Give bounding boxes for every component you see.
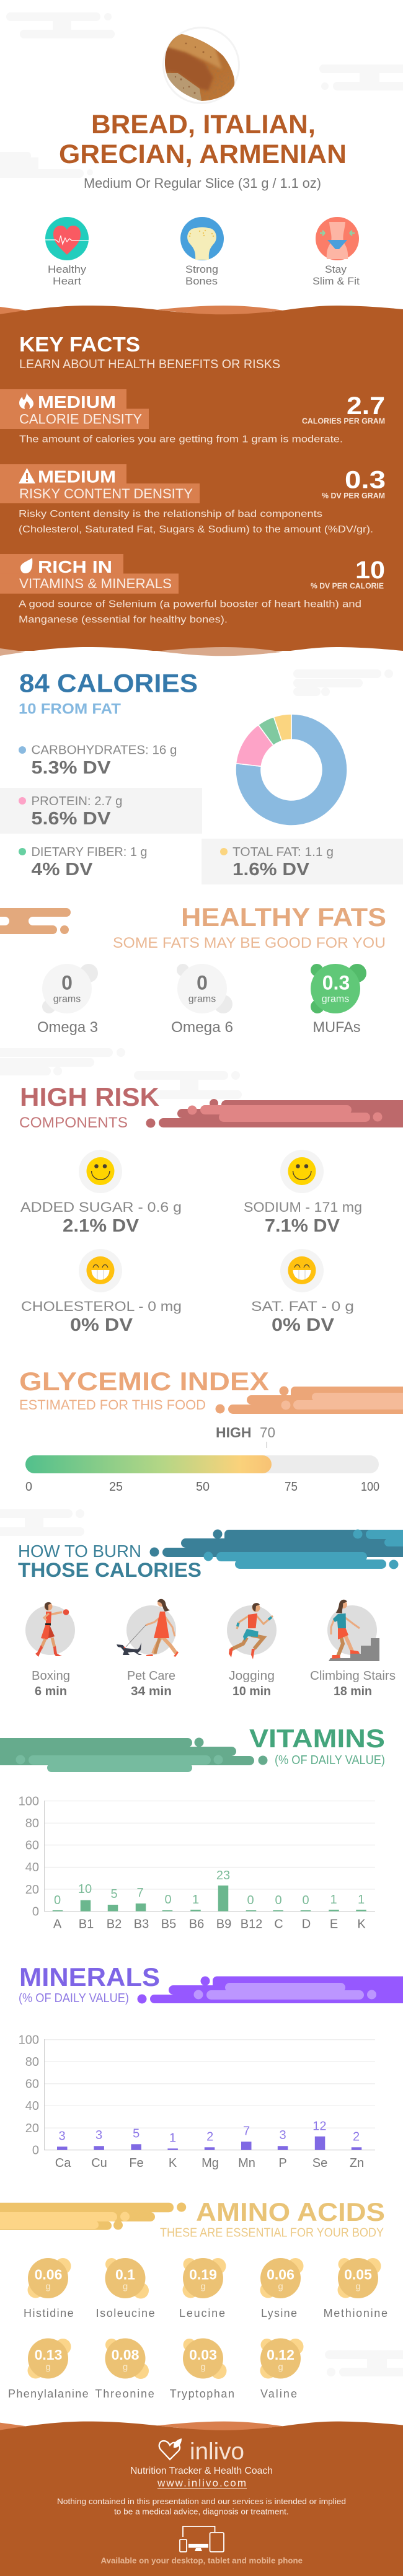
gauge axis labels: 50 xyxy=(196,1480,210,1494)
fact: risky content density: RISKY CONTENT DENSITY xyxy=(19,486,193,501)
activity: pet care xyxy=(117,1599,179,1698)
legend: protein xyxy=(19,795,123,829)
legend: total fat xyxy=(220,845,334,880)
activity: climbing stairs xyxy=(310,1600,396,1698)
subtitle: serving size: Medium Or Regular Slice (31 g / 1.1 oz) xyxy=(84,175,321,191)
title: BREAD, ITALIAN, xyxy=(91,110,316,139)
gauge value: high 70: HIGH xyxy=(216,1424,252,1440)
icon: devices xyxy=(180,2526,224,2552)
banner: glycemic index xyxy=(216,1386,403,1414)
bar chart: minerals: 40 xyxy=(25,2099,39,2113)
banner: amino acids xyxy=(0,2203,186,2230)
icon: leaf xyxy=(20,558,32,573)
bar chart: minerals: 1 xyxy=(169,2132,176,2145)
amino: phenylalanine: g xyxy=(45,2362,51,2373)
bar chart: minerals: Ca xyxy=(55,2156,71,2170)
fact: risky content density xyxy=(0,464,386,535)
amino: histidine: Histidine xyxy=(24,2307,74,2319)
amino: lysine: 0.06 xyxy=(267,2266,294,2282)
panel: minerals xyxy=(19,1962,403,2170)
bar chart: vitamins: 23 xyxy=(216,1869,230,1882)
bar chart: minerals: Cu xyxy=(91,2156,107,2170)
item: sodium xyxy=(244,1150,362,1236)
item: sodium: 7.1% DV xyxy=(265,1216,340,1236)
fact: risky content density: % DV PER GRAM xyxy=(322,491,385,500)
bar chart: minerals xyxy=(19,2033,375,2170)
icon: grinning face xyxy=(288,1256,316,1284)
item: saturated fat: 0% DV xyxy=(272,1315,335,1335)
amino: phenylalanine: Phenylalanine xyxy=(8,2388,89,2400)
bar chart: minerals: 0 xyxy=(32,2143,39,2157)
fact: risky content density: (Cholesterol, Saturated Fat, Sugars & Sodium) to the amount (%DV/gr). xyxy=(19,524,373,535)
fact: calorie density: MEDIUM xyxy=(38,392,116,412)
icon: grinning face xyxy=(87,1256,114,1284)
amino: tryptophan: g xyxy=(200,2362,206,2373)
bar chart: vitamins: 1 xyxy=(192,1893,199,1907)
subheading: components: COMPONENTS xyxy=(19,1114,128,1131)
logo: inlivo: inlivo xyxy=(190,2438,244,2464)
fact: calorie density: 2.7 xyxy=(347,392,385,420)
fact: rich in vitamins and minerals xyxy=(0,554,385,625)
stat: omega 6: grams xyxy=(188,994,216,1004)
amino: tryptophan: Tryptophan xyxy=(170,2388,234,2400)
activity: jogging: 10 min xyxy=(232,1685,271,1698)
amino: lysine xyxy=(260,2258,304,2319)
bar chart: vitamins: 7 xyxy=(136,1886,144,1900)
amino: tryptophan: 0.03 xyxy=(189,2347,217,2363)
heading: how to burn those calories: HOW TO BURN xyxy=(18,1542,141,1561)
amino: phenylalanine: 0.13 xyxy=(35,2347,62,2363)
availability note: Available on your desktop, tablet and mobile phone xyxy=(100,2556,303,2565)
amino: histidine: 0.06 xyxy=(35,2266,62,2282)
activity: boxing: Boxing xyxy=(32,1669,70,1683)
amino: isoleucine xyxy=(96,2258,155,2319)
amino: leucine: 0.19 xyxy=(189,2266,217,2282)
bar chart: minerals: 7 xyxy=(243,2125,250,2138)
tagline: Nutrition Tracker & Health Coach xyxy=(130,2466,273,2476)
bar chart: vitamins: A xyxy=(53,1918,62,1931)
legend: dietary fiber xyxy=(19,845,148,880)
panel: healthy fats xyxy=(0,902,386,1036)
item: added sugar: ADDED SUGAR - 0.6 g xyxy=(20,1199,182,1215)
icon: flame xyxy=(19,392,33,409)
fact: rich in vitamins and minerals: Manganese (essential for healthy bones). xyxy=(19,615,228,625)
bar chart: vitamins: B1 xyxy=(79,1918,94,1931)
amino: leucine: g xyxy=(200,2281,206,2292)
bar chart: minerals: 5 xyxy=(133,2127,140,2141)
bar chart: vitamins: D xyxy=(302,1918,311,1931)
amino: histidine xyxy=(24,2258,74,2319)
bar chart: vitamins: 0 xyxy=(32,1905,39,1919)
stat: mufas: MUFAs xyxy=(312,1019,361,1036)
bar chart: vitamins: B3 xyxy=(134,1918,149,1931)
fact: risky content density: MEDIUM xyxy=(38,467,116,486)
amino: leucine: Leucine xyxy=(179,2307,225,2319)
bar chart: vitamins: 1 xyxy=(330,1893,337,1907)
bar chart: minerals: 2 xyxy=(353,2130,360,2144)
amino: isoleucine: Isoleucine xyxy=(96,2307,155,2319)
panel: glycemic index xyxy=(19,1367,403,1494)
amino: threonine: 0.08 xyxy=(112,2347,140,2363)
panel: footer xyxy=(0,2422,403,2576)
subheading: healthy fats: SOME FATS MAY BE GOOD FOR YOU xyxy=(113,935,386,951)
gauge axis labels xyxy=(25,1480,379,1494)
bar chart: minerals: 3 xyxy=(95,2128,102,2142)
figure: jogger xyxy=(229,1603,273,1659)
bar chart: vitamins: 0 xyxy=(302,1894,309,1907)
panel: high risk components xyxy=(19,1082,403,1335)
icon: strong bones xyxy=(180,217,224,260)
bar chart: vitamins: 60 xyxy=(25,1838,39,1852)
heading: how to burn those calories xyxy=(18,1542,202,1581)
figure: boxer xyxy=(35,1602,69,1657)
gauge axis labels: 25 xyxy=(109,1480,123,1494)
bar chart: minerals: Mn xyxy=(238,2156,255,2170)
bar chart: vitamins: K xyxy=(357,1918,366,1931)
fact: rich in vitamins and minerals: 10 xyxy=(355,557,385,584)
bar chart: vitamins: B9 xyxy=(216,1918,231,1931)
icon: slim and fit xyxy=(316,217,359,260)
panel: vitamins xyxy=(0,1724,385,1931)
banner: burn xyxy=(150,1530,403,1569)
bar chart: vitamins: B6 xyxy=(189,1918,204,1931)
panel: amino acids xyxy=(0,2197,388,2400)
amino: lysine: Lysine xyxy=(261,2307,297,2319)
item: added sugar xyxy=(20,1150,182,1236)
bar chart: minerals: Mg xyxy=(202,2156,219,2170)
disclaimer: to be a medical advice, diagnosis or treatment. xyxy=(114,2507,289,2516)
subheading: percent of daily value: (% OF DAILY VALUE) xyxy=(275,1753,385,1767)
activity: climbing stairs: 18 min xyxy=(334,1685,372,1698)
bar chart: minerals: K xyxy=(169,2156,177,2170)
subheading: estimated: ESTIMATED FOR THIS FOOD xyxy=(19,1397,206,1413)
label: healthy heart: Healthy xyxy=(48,263,87,275)
activity: climbing stairs: Climbing Stairs xyxy=(310,1669,396,1683)
stat: omega 6: Omega 6 xyxy=(171,1019,233,1036)
stat: mufas: grams xyxy=(322,994,349,1004)
fact: calorie density xyxy=(0,389,385,445)
figure: woman walking dog xyxy=(117,1599,179,1657)
subheading: percent of daily value: (% OF DAILY VALUE) xyxy=(19,1992,129,2005)
amino: valine xyxy=(260,2338,304,2400)
gauge value: high 70: 70 xyxy=(260,1424,275,1440)
icon: smiling face xyxy=(288,1157,316,1185)
banner: minerals xyxy=(138,1976,403,2003)
legend: protein: PROTEIN: 2.7 g xyxy=(31,795,123,808)
panel: header xyxy=(45,27,360,287)
item: cholesterol: 0% DV xyxy=(70,1315,133,1335)
fact: risky content density: 0.3 xyxy=(345,466,386,493)
panel: how to burn those calories xyxy=(18,1530,403,1698)
fact: rich in vitamins and minerals: VITAMINS & MINERALS xyxy=(19,576,172,591)
activity: boxing: 6 min xyxy=(35,1685,67,1698)
heading: key facts xyxy=(19,333,280,371)
bar chart: vitamins: 5 xyxy=(110,1887,118,1901)
amino: isoleucine: g xyxy=(123,2281,128,2292)
figure: woman on stairs xyxy=(329,1600,379,1661)
fact: calorie density: The amount of calories you are getting from 1 gram is moderate. xyxy=(19,434,343,445)
heading: calories: 84 CALORIES xyxy=(19,668,198,698)
item: cholesterol: CHOLESTEROL - 0 mg xyxy=(21,1299,182,1314)
label: healthy heart: Heart xyxy=(53,275,81,287)
bar chart: vitamins: E xyxy=(330,1918,338,1931)
bar chart: vitamins xyxy=(19,1795,375,1931)
stat: omega 3 xyxy=(37,964,98,1036)
bar chart: vitamins: 10 xyxy=(78,1882,92,1896)
bar chart: vitamins: B5 xyxy=(161,1918,176,1931)
bar chart: minerals: 3 xyxy=(58,2130,66,2143)
icon: healthy heart xyxy=(45,217,89,260)
stat: omega 3: 0 xyxy=(61,972,73,994)
stat: omega 6: 0 xyxy=(197,972,208,994)
label: strong bones: Bones xyxy=(185,275,218,287)
activity: boxing xyxy=(25,1602,75,1698)
bar chart: vitamins: 0 xyxy=(54,1894,61,1907)
legend: total fat: TOTAL FAT: 1.1 g xyxy=(232,845,334,859)
amino: phenylalanine xyxy=(8,2338,89,2400)
activity: pet care: Pet Care xyxy=(127,1669,175,1683)
amino: threonine: g xyxy=(123,2362,128,2373)
legend: protein: 5.6% DV xyxy=(31,809,111,829)
heading: glycemic index: GLYCEMIC INDEX xyxy=(19,1367,269,1396)
item: cholesterol xyxy=(21,1249,182,1335)
amino: threonine xyxy=(95,2338,154,2400)
subheading: essential for your body: THESE ARE ESSENTIAL FOR YOUR BODY xyxy=(160,2226,384,2240)
stat: mufas xyxy=(311,964,366,1036)
amino: methionine xyxy=(324,2258,388,2319)
icon: warning triangle xyxy=(19,468,35,483)
heading: calories: 10 FROM FAT xyxy=(19,700,121,718)
amino: threonine: Threonine xyxy=(95,2388,154,2400)
bar chart: vitamins: 20 xyxy=(25,1883,39,1897)
amino: lysine: g xyxy=(278,2281,283,2292)
fact: rich in vitamins and minerals: RICH IN xyxy=(38,557,112,576)
activity: pet care: 34 min xyxy=(131,1685,172,1698)
amino: leucine xyxy=(179,2258,226,2319)
amino: methionine: g xyxy=(355,2281,361,2292)
fact: calorie density: CALORIES PER GRAM xyxy=(302,417,385,425)
stat: omega 3: Omega 3 xyxy=(37,1019,98,1036)
fact: rich in vitamins and minerals: % DV PER CALORIE xyxy=(311,581,384,590)
bar chart: vitamins: 40 xyxy=(25,1861,39,1874)
gauge bar xyxy=(25,1455,379,1473)
activity: jogging: Jogging xyxy=(229,1669,275,1683)
amino: tryptophan xyxy=(170,2338,234,2400)
fact: rich in vitamins and minerals: A good source of Selenium (a powerful booster of heart health) and xyxy=(19,599,361,610)
legend: carbohydrates xyxy=(19,744,177,778)
bar chart: vitamins: 0 xyxy=(164,1893,172,1907)
bar chart: vitamins: 1 xyxy=(358,1893,365,1907)
heading: minerals: MINERALS xyxy=(19,1962,160,1992)
amino: valine: g xyxy=(278,2362,283,2373)
bar chart: minerals: 80 xyxy=(25,2055,39,2069)
stat: omega 6 xyxy=(171,964,233,1036)
bar chart: vitamins: B2 xyxy=(107,1918,122,1931)
gauge axis labels: 100 xyxy=(361,1480,379,1494)
panel: key facts xyxy=(0,306,403,666)
legend: carbohydrates: 5.3% DV xyxy=(31,758,111,778)
label: strong bones: Strong xyxy=(185,263,218,275)
bar chart: vitamins: 0 xyxy=(275,1894,282,1907)
bar chart: vitamins: B12 xyxy=(241,1918,262,1931)
stat: mufas: 0.3 xyxy=(322,972,350,994)
heading: vitamins: VITAMINS xyxy=(249,1724,385,1753)
banner: high risk xyxy=(146,1099,403,1128)
heading: key facts: LEARN ABOUT HEALTH BENEFITS OR RISKS xyxy=(19,358,280,371)
legend: dietary fiber: DIETARY FIBER: 1 g xyxy=(31,845,148,859)
food photo: bread loaf xyxy=(162,27,239,104)
logo: inlivo xyxy=(159,2438,244,2464)
bar chart: vitamins: C xyxy=(274,1918,283,1931)
heading: high risk: HIGH RISK xyxy=(20,1082,159,1111)
website link: www.inlivo.com xyxy=(157,2477,246,2489)
item: added sugar: 2.1% DV xyxy=(63,1216,140,1236)
bar chart: minerals: Fe xyxy=(129,2156,144,2170)
gauge axis labels: 75 xyxy=(285,1480,298,1494)
fact: risky content density: Risky Content density is the relationship of bad components xyxy=(19,509,322,519)
bar chart: minerals: 12 xyxy=(312,2120,327,2133)
amino: valine: 0.12 xyxy=(267,2347,294,2363)
bar chart: vitamins: 0 xyxy=(247,1894,254,1907)
title: GRECIAN, ARMENIAN xyxy=(59,139,347,169)
amino: methionine: Methionine xyxy=(324,2307,388,2319)
heading: how to burn those calories: THOSE CALORIES xyxy=(18,1559,202,1581)
gauge axis labels: 0 xyxy=(25,1480,32,1494)
gauge value: high 70 xyxy=(216,1424,275,1448)
bar chart: minerals: Zn xyxy=(350,2156,364,2170)
item: sodium: SODIUM - 171 mg xyxy=(244,1199,362,1215)
bar chart: vitamins: 100 xyxy=(19,1795,39,1809)
heading: key facts: KEY FACTS xyxy=(19,333,140,356)
fact: calorie density: CALORIE DENSITY xyxy=(19,412,142,426)
item: saturated fat: SAT. FAT - 0 g xyxy=(251,1299,354,1314)
activity: jogging xyxy=(227,1603,277,1698)
stat: omega 3: grams xyxy=(53,994,81,1004)
banner: vitamins xyxy=(0,1738,268,1772)
bar chart: minerals: 60 xyxy=(25,2078,39,2091)
bar chart: minerals: P xyxy=(278,2156,287,2170)
bar chart: minerals: 3 xyxy=(279,2128,286,2142)
bar chart: minerals: 2 xyxy=(206,2130,213,2144)
amino: histidine: g xyxy=(45,2281,51,2292)
banner: healthy fats xyxy=(0,908,71,934)
legend: total fat: 1.6% DV xyxy=(232,860,310,880)
bar chart: minerals: 20 xyxy=(25,2122,39,2135)
donut chart: calorie sources xyxy=(236,714,347,826)
label: stay slim and fit: Stay xyxy=(325,263,347,275)
icon: smiling face xyxy=(87,1157,114,1185)
title xyxy=(59,110,347,169)
legend: dietary fiber: 4% DV xyxy=(31,860,93,880)
disclaimer: Nothing contained in this presentation and our services is intended or implied xyxy=(57,2497,346,2506)
panel: calories xyxy=(0,668,403,884)
item: saturated fat xyxy=(251,1249,354,1335)
bar chart: minerals: 100 xyxy=(19,2033,39,2047)
legend: carbohydrates: CARBOHYDRATES: 16 g xyxy=(31,744,177,757)
amino: valine: Valine xyxy=(260,2388,297,2400)
heading: amino acids: AMINO ACIDS xyxy=(196,2197,385,2226)
heading: healthy fats: HEALTHY FATS xyxy=(181,902,386,932)
bar chart: minerals: Se xyxy=(312,2156,327,2170)
heading: calories xyxy=(19,668,198,718)
amino: isoleucine: 0.1 xyxy=(115,2266,135,2282)
label: stay slim and fit: Slim & Fit xyxy=(312,275,360,287)
amino: methionine: 0.05 xyxy=(344,2266,372,2282)
bar chart: vitamins: 80 xyxy=(25,1817,39,1830)
